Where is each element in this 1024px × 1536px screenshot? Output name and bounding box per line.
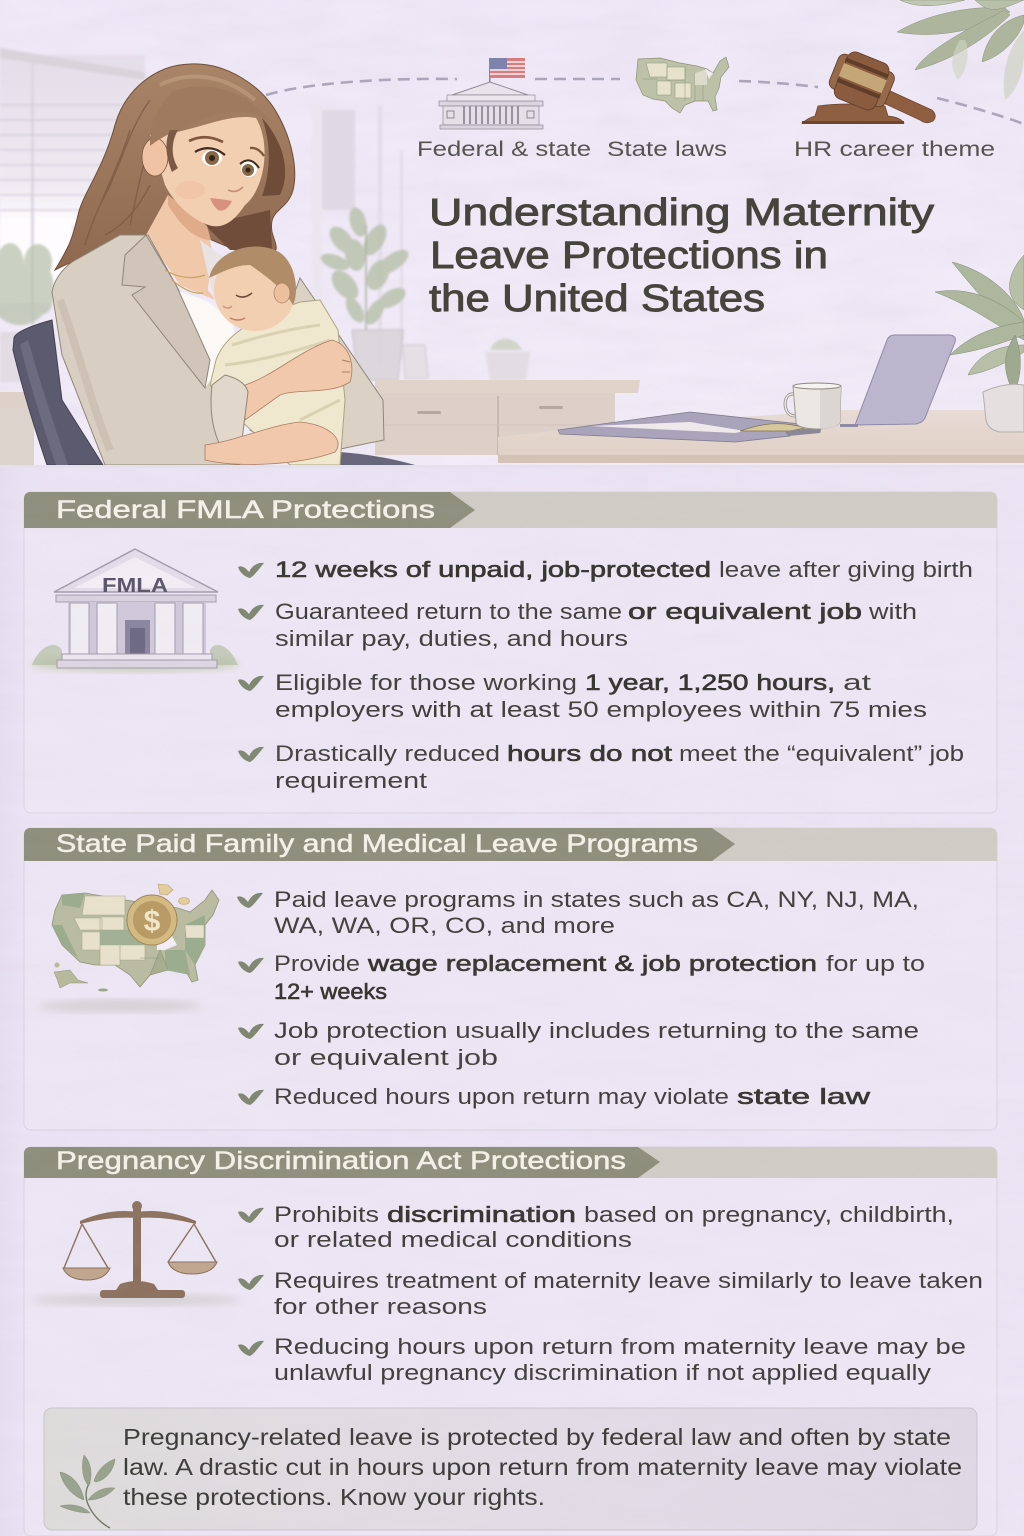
white blouse [175, 290, 235, 388]
bullet list: employers with at least 50 employees within 75 mies [275, 697, 927, 722]
icon labels [417, 138, 995, 161]
header band: State Paid Family and Medical Leave Programs [56, 830, 698, 858]
hair fringe [150, 86, 270, 146]
bullet list: leave after giving birth [719, 557, 973, 582]
baby wrap [210, 300, 345, 465]
bullet list: Reducing hours upon return from maternity leave may be [274, 1334, 966, 1359]
bullet list: or equivalent job [274, 1045, 498, 1070]
baby head [209, 246, 296, 331]
neck and chest [146, 195, 215, 300]
title [429, 192, 934, 320]
title: Understanding Maternity [429, 192, 934, 234]
bullet list [238, 557, 973, 793]
title: the United States [429, 278, 765, 320]
hero banner [0, 0, 1024, 468]
bullet list: Job protection usually includes returning to the same [274, 1018, 919, 1043]
icon: scales of justice [30, 1201, 240, 1306]
icon: olive sprig [60, 1455, 115, 1528]
icon: US map with dollar coin: $ [144, 905, 161, 938]
illustration: mother holding baby [52, 64, 384, 465]
office desk with drawers [0, 380, 640, 465]
background plant and pot [319, 205, 530, 380]
ear [142, 138, 168, 176]
bullet list [237, 887, 925, 1109]
notebook [558, 412, 822, 442]
bullet list: Paid leave programs in states such as CA, NY, NJ, MA, [274, 887, 919, 912]
eyes, brows, nose and lips [175, 137, 264, 211]
mother's hair [55, 64, 295, 270]
hero bottom edge [0, 465, 1024, 468]
dashed connector lines [266, 79, 1024, 124]
bullet list: or equivalent job [628, 599, 862, 624]
callout: summary: these protections. Know your rights. [123, 1484, 545, 1510]
icon: FMLA courthouse: FMLA [102, 575, 168, 597]
bullet list: Reduced hours upon return may violate [274, 1084, 729, 1109]
bullet list: 1 year, 1,250 hours, [585, 670, 835, 695]
bullet list: wage replacement & job protection [367, 951, 817, 976]
icon: FMLA courthouse [30, 549, 240, 672]
icon: small US map [636, 57, 729, 113]
background plant left [0, 243, 54, 382]
icon labels: State laws [607, 138, 727, 161]
bullet list [238, 1202, 983, 1385]
bullet list: state law [737, 1084, 870, 1109]
bullet list: requirement [275, 768, 427, 793]
paper texture overlay [0, 468, 1024, 1536]
panel: pregnancy discrimination act protections [24, 1147, 997, 1536]
bullet list: with [868, 599, 917, 624]
office chair [13, 320, 415, 465]
bullet list: for up to [826, 951, 925, 976]
mother's forearm and hand [245, 340, 352, 420]
laptop [840, 335, 955, 427]
blazer [52, 235, 240, 465]
bullet list: similar pay, duties, and hours [275, 626, 628, 651]
bullet list: hours do not [507, 741, 672, 766]
coffee mug [785, 383, 841, 429]
title: Leave Protections in [430, 235, 828, 277]
panel: federal FMLA protections [24, 492, 997, 813]
header band [24, 1147, 997, 1178]
bullet list: Eligible for those working [275, 670, 577, 695]
office window with blinds [0, 48, 403, 365]
header band: Pregnancy Discrimination Act Protections [56, 1147, 626, 1175]
callout: summary [44, 1408, 977, 1530]
panel: state paid family and medical leave [24, 828, 997, 1130]
bullet list: Drastically reduced [275, 741, 500, 766]
callout: summary: law. A drastic cut in hours upon return from maternity leave may violate [123, 1454, 962, 1480]
bullet list: Guaranteed return to the same [275, 599, 622, 624]
bullet list: discrimination [387, 1202, 576, 1227]
bullet list: 12+ weeks [274, 979, 387, 1004]
bullet list: WA, WA, OR, CO, and more [274, 913, 615, 938]
bullet list: Requires treatment of maternity leave similarly to leave taken [274, 1268, 983, 1293]
table top [498, 410, 1024, 463]
bullet list: unlawful pregnancy discrimination if not applied equally [274, 1360, 931, 1385]
necklace [165, 270, 205, 293]
bullet list: or related medical conditions [274, 1227, 632, 1252]
bullet list: Provide [274, 951, 360, 976]
icon: federal building with flag [439, 58, 543, 129]
corner foliage [897, 0, 1024, 100]
callout: summary: Pregnancy-related leave is protected by federal law and often by state [123, 1424, 951, 1450]
icon labels: Federal & state [417, 138, 591, 161]
header band [24, 492, 997, 528]
right sleeve [250, 278, 384, 460]
bullet list: meet the “equivalent” job [679, 741, 964, 766]
header band [24, 828, 997, 861]
header band: Federal FMLA Protections [56, 496, 435, 524]
bullet list: Prohibits [274, 1202, 379, 1227]
bullet list: based on pregnancy, childbirth, [584, 1202, 954, 1227]
face [150, 117, 265, 226]
icon labels: HR career theme [794, 138, 995, 161]
icon: US map with dollar coin [38, 884, 219, 1013]
bullet list: at [843, 670, 871, 695]
icon: gavel [802, 47, 935, 124]
bullet list: for other reasons [274, 1294, 487, 1319]
bullet list: 12 weeks of unpaid, job-protected [275, 557, 711, 582]
plant with pot [935, 255, 1024, 432]
